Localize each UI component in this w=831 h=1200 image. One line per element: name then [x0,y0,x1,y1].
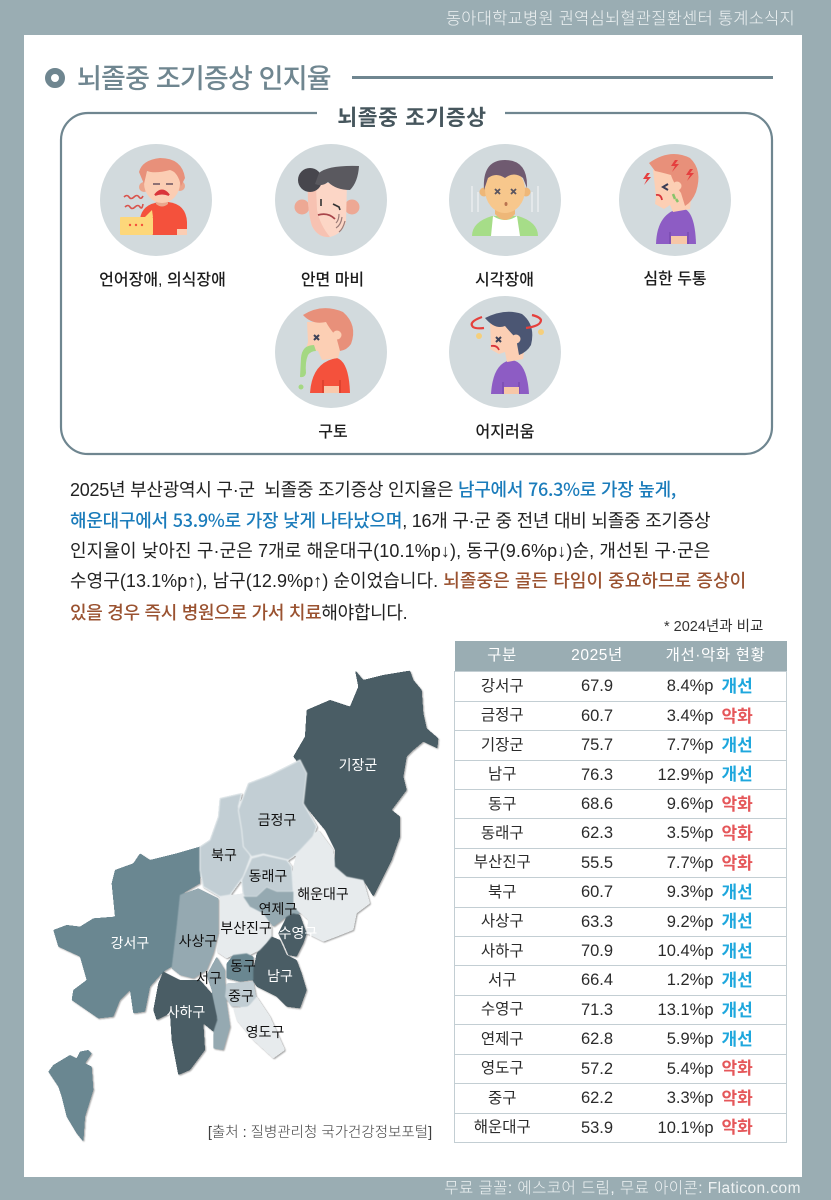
district: Seo [207,957,230,1050]
table: awareness by district: 영도구 [481,1060,524,1077]
table: awareness by district: 7.7%p [667,736,714,754]
table: awareness by district: 수영구 [481,1001,524,1018]
table: awareness by district: 사상구 [481,913,524,930]
icon: facial palsy [275,144,387,256]
source note: [출처 : 질병관리청 국가건강정보포털] [208,1124,432,1141]
table: awareness by district: 9.6%p [667,795,714,813]
table: awareness by district [454,641,787,1143]
map labels: 부산진구 [220,920,272,936]
table: awareness by district: 북구 [488,884,517,901]
district: Buk [200,793,251,897]
map labels: 금정구 [258,812,296,828]
table: awareness by district: 68.6 [581,795,613,813]
table: awareness by district: 개선·악화 현황 [666,647,765,664]
icon: vision disorder [449,144,561,256]
table: awareness by district: 2025년 [571,647,623,664]
table: awareness by district: 부산진구 [474,854,531,871]
title bullet ring [45,68,65,88]
table: awareness by district: 10.1%p [658,1118,714,1136]
map labels: 영도구 [246,1024,284,1040]
icon: speech and consciousness disorder [100,144,212,256]
table: awareness by district: 62.8 [581,1030,613,1048]
table: awareness by district: 1.2%p [667,971,714,989]
line 5: 있을 경우 즉시 병원으로 가서 치료해야합니다. [70,599,407,625]
line 4: 수영구(13.1%p↑), 남구(12.9%p↑) 순이었습니다. 뇌졸중은 골든 타임이 중요하므로 증상이 [70,567,746,593]
table: awareness by district: 강서구 [481,678,524,695]
map labels: 사하구 [167,1004,205,1020]
table: awareness by district: 개선 [722,971,753,990]
table: awareness by district: 71.3 [581,1001,613,1019]
table: awareness by district: 10.4%p [658,942,714,960]
district: Gijang [293,670,438,897]
table: awareness by district: 9.3%p [667,883,714,901]
table: awareness by district: 60.7 [581,883,613,901]
map labels: 서구 [196,970,222,986]
table: awareness by district: 기장군 [481,737,524,754]
map labels: 남구 [267,968,293,984]
district: Sasang [172,888,218,978]
district: Busanjin [217,893,272,958]
table: awareness by district: 금정구 [481,707,524,724]
table: awareness by district: 3.3%p [667,1089,714,1107]
table: awareness by district: 62.3 [581,824,613,842]
line 1: 2025년 부산광역시 구·군 뇌졸중 조기증상 인지율은 남구에서 76.3%로 가장 높게, [70,476,676,502]
label: speech disorder: 언어장애, 의식장애 [99,271,226,289]
table: awareness by district: 해운대구 [474,1119,531,1136]
table: awareness by district: 5.4%p [667,1060,714,1078]
table: awareness by district: 악화 [722,1059,753,1078]
box outline [61,113,772,454]
table: awareness by district: 76.3 [581,766,613,784]
district: Jung [225,982,257,1007]
label: vision disorder: 시각장애 [475,271,534,289]
text block: summary paragraph [70,476,746,625]
label: dizziness: 어지러움 [476,423,534,441]
table: awareness by district: 12.9%p [658,766,714,784]
header source text: 동아대학교병원 권역심뇌혈관질환센터 통계소식지 [446,10,795,28]
panel heading: 뇌졸중 조기증상 [337,106,487,130]
table: awareness by district: 8.4%p [667,677,714,695]
table: awareness by district: 55.5 [581,854,613,872]
map labels: 동구 [230,958,256,974]
table: awareness by district: 60.7 [581,707,613,725]
panel: early symptoms box with icons [60,106,774,456]
district: Dongrae [242,855,293,897]
table: awareness by district: 중구 [488,1090,517,1107]
map labels: 기장군 [339,757,377,773]
table: awareness by district: 57.2 [581,1060,613,1078]
label: facial palsy: 안면 마비 [301,271,364,289]
icon: dizziness [449,296,561,408]
title rule [352,76,773,79]
table: awareness by district: 5.9%p [667,1030,714,1048]
table: awareness by district: 악화 [722,1089,753,1108]
table: awareness by district: 개선 [722,736,753,755]
map labels: 사상구 [179,933,217,949]
table: awareness by district: 연제구 [481,1031,524,1048]
table: awareness by district: 악화 [722,824,753,843]
table: awareness by district: 개선 [722,912,753,931]
table: awareness by district: 53.9 [581,1118,613,1136]
table: awareness by district: 사하구 [481,943,524,960]
district: Nam [252,937,307,1008]
table: awareness by district: 구분 [487,647,517,664]
map labels: 동래구 [249,868,287,884]
table: awareness by district: 개선 [722,942,753,961]
table: awareness by district: 개선 [722,883,753,902]
map labels: 연제구 [259,901,297,917]
map labels: 중구 [228,988,254,1004]
table: awareness by district: 67.9 [581,677,613,695]
label: vomiting: 구토 [318,424,348,441]
table: awareness by district: 악화 [722,795,753,814]
district: Dong [227,953,253,982]
district: Yeonje [243,887,300,927]
table: awareness by district: 13.1%p [658,1001,714,1019]
table: awareness by district: 3.4%p [667,707,714,725]
comparison note: * 2024년과 비교 [664,619,763,635]
table: awareness by district: 개선 [722,677,753,696]
table: awareness by district: 75.7 [581,736,613,754]
table: awareness by district: 63.3 [581,913,613,931]
district: Yeongdo [233,997,285,1058]
line 2: 해운대구에서 53.9%로 가장 낮게 나타났으며, 16개 구·군 중 전년 대비 뇌졸중 조기증상 [70,507,710,533]
table: awareness by district: 7.7%p [667,854,714,872]
map labels: 강서구 [111,935,149,951]
district: Geumjeong [238,760,317,860]
table: awareness by district: 개선 [722,1030,753,1049]
district: Saha [153,972,217,1075]
map labels: 북구 [211,847,237,863]
map labels: 해운대구 [297,886,349,902]
district: Gangseo island [48,1050,93,1142]
district: Haeundae [293,830,370,942]
district: Gangseo [53,847,200,1018]
table: awareness by district: 9.2%p [667,913,714,931]
footer credits: 무료 글꼴: 에스코어 드림, 무료 아이콘: Flaticon.com [444,1180,801,1197]
district: Suyeong [278,913,307,957]
table: awareness by district: 악화 [722,854,753,873]
table: awareness by district: 서구 [488,972,517,989]
table: awareness by district: 악화 [722,1118,753,1137]
table: awareness by district: 악화 [722,707,753,726]
map labels [111,757,377,1040]
map labels: 수영구 [279,925,317,941]
table: awareness by district: 동래구 [481,825,524,842]
table: awareness by district: 개선 [722,1001,753,1020]
table: awareness by district: 남구 [488,766,517,783]
icon: severe headache [619,144,731,256]
table: awareness by district: 3.5%p [667,824,714,842]
title: 뇌졸중 조기증상 인지율 [77,64,331,94]
icon: vomiting [275,296,387,408]
table: awareness by district: 70.9 [581,942,613,960]
table: awareness by district: 62.2 [581,1089,613,1107]
table: awareness by district: 66.4 [581,971,613,989]
label: severe headache: 심한 두통 [643,270,707,288]
line 3: 인지율이 낮아진 구·군은 7개로 해운대구(10.1%p↓), 동구(9.6%p↓)순, 개선된 구·군은 [70,541,710,561]
table: awareness by district: 개선 [722,765,753,784]
table: awareness by district: 동구 [488,796,517,812]
